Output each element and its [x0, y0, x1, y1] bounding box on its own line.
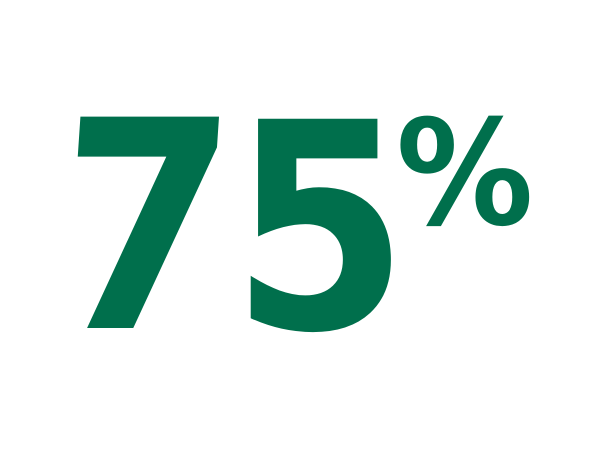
- percent sign: %: [396, 89, 533, 259]
- number 5: 5: [231, 63, 409, 397]
- number 7: 7: [45, 59, 243, 397]
